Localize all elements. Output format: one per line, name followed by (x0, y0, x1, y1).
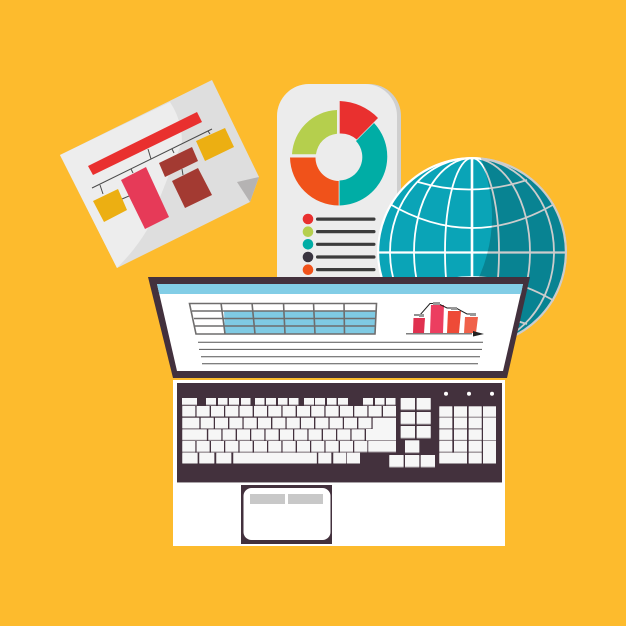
chart arrow (473, 331, 484, 336)
illustration (60, 80, 567, 546)
text lines (198, 342, 483, 364)
laptop (148, 277, 530, 546)
org chart connectors (92, 129, 212, 199)
crimson box (121, 167, 169, 229)
chart axis (406, 333, 472, 335)
donut chart (290, 101, 387, 206)
laptop screen frame (148, 277, 530, 378)
keys (182, 398, 496, 468)
globe shaded side (479, 158, 567, 336)
screen title bar (157, 284, 523, 294)
brown box lower (172, 168, 212, 208)
touchpad (241, 485, 332, 544)
card shadow edge (280, 84, 401, 314)
laptop base (173, 380, 505, 546)
paper corner fold (237, 177, 259, 202)
card body (277, 84, 397, 314)
document with org chart (60, 80, 259, 268)
right yellow box (196, 128, 234, 161)
chart markers (419, 302, 476, 317)
globe grid (377, 158, 567, 346)
table (190, 303, 376, 334)
left yellow box (93, 189, 127, 222)
indicator lights (444, 392, 494, 396)
legend (303, 214, 376, 275)
chart trend line (414, 304, 473, 315)
brown box upper (159, 147, 198, 177)
report card with donut chart (277, 84, 401, 314)
table grid (190, 303, 376, 334)
table blue cells (224, 311, 376, 334)
top red bar (88, 112, 202, 175)
screen display (157, 284, 523, 371)
globe sphere (378, 158, 566, 346)
bar chart (406, 302, 484, 336)
globe (377, 157, 567, 336)
keyboard deck (177, 383, 502, 483)
paper sheet (60, 80, 259, 268)
paper light area (60, 102, 182, 268)
